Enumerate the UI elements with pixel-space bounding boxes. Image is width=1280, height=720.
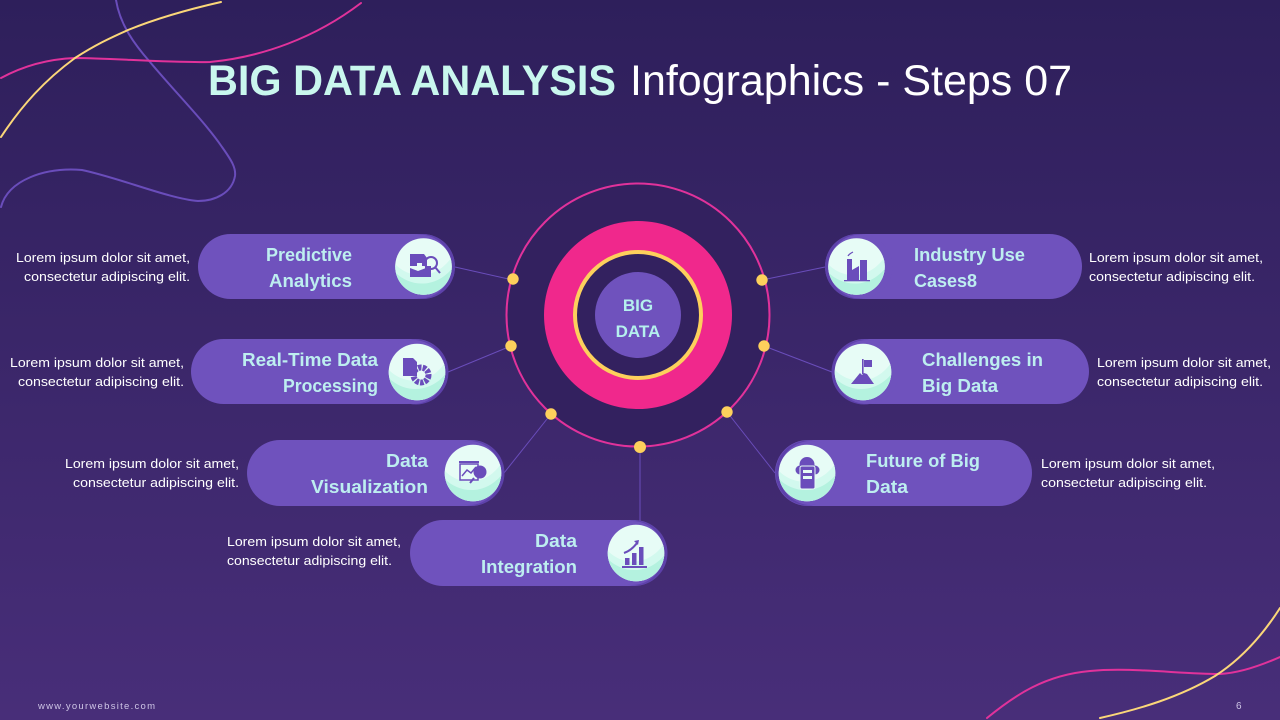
icon: rising bar chart [622,540,647,568]
pill: Data Integration: Integration [481,557,577,577]
title: Infographics - Steps 07 [630,57,1072,105]
pill: Challenges in Big Data: Challenges in [922,350,1043,370]
pill: Predictive Analytics: Predictive [266,245,352,265]
pill: Data Integration [410,520,668,586]
description: Predictive Analytics: consectetur adipiscing elit. [24,270,190,284]
pill: Challenges in Big Data: Big Data [922,376,999,396]
pill: Predictive Analytics [198,234,455,299]
description: Data Integration: Lorem ipsum dolor sit amet, [227,535,401,549]
pill: Predictive Analytics: Analytics [269,271,352,291]
pill: Data Visualization: Data [386,451,429,471]
description: Challenges in Big Data: consectetur adipiscing elit. [1097,375,1263,389]
pill: Future of Big Data: Future of Big [866,451,980,471]
connector lines [448,267,832,521]
description: Future of Big Data [1041,457,1215,490]
pill: Real-Time Data Processing: Processing [283,376,378,396]
title: BIG DATA ANALYSIS [208,57,616,105]
description: Future of Big Data: consectetur adipiscing elit. [1041,476,1207,490]
page number: 6 [1236,701,1242,712]
description: Future of Big Data: Lorem ipsum dolor sit amet, [1041,457,1215,471]
description: Data Integration: consectetur adipiscing elit. [227,554,392,568]
description: Real-Time Data Processing [10,356,184,389]
icon: factory [844,252,870,281]
description: Predictive Analytics: Lorem ipsum dolor sit amet, [16,251,190,265]
description: Data Visualization [65,457,239,490]
pill: Real-Time Data Processing [191,339,448,404]
pill: Challenges in Big Data [832,339,1089,404]
pill: Future of Big Data: Data [866,477,909,497]
description: Data Visualization: Lorem ipsum dolor sit amet, [65,457,239,471]
title [208,57,1072,105]
icon: report with magnifier [410,254,440,277]
connector dots [505,273,770,453]
pill: Data Visualization [247,440,504,506]
description: Real-Time Data Processing: consectetur adipiscing elit. [18,375,184,389]
icon: document and gear [403,358,428,382]
description: Real-Time Data Processing: Lorem ipsum dolor sit amet, [10,356,184,370]
pill: Industry Use Cases [825,234,1082,299]
icon: chart board with magnifier [459,461,486,483]
description: Challenges in Big Data: Lorem ipsum dolor sit amet, [1097,356,1271,370]
description: Predictive Analytics [16,251,190,284]
pill: Industry Use Cases: Cases8 [914,271,977,291]
pill: Data Integration: Data [535,531,578,551]
pill: Data Visualization: Visualization [311,477,428,497]
decorative curves bottom right [987,608,1280,718]
pill: Industry Use Cases: Industry Use [914,245,1025,265]
pill: Real-Time Data Processing: Real-Time Data [242,350,379,370]
center label: BIG [623,296,653,315]
description: Industry Use Cases [1089,251,1263,284]
icon: flag on mountain [851,359,874,384]
description: Data Integration [227,535,401,568]
description: Challenges in Big Data [1097,356,1271,389]
decorative curves top left [1,0,361,207]
description: Industry Use Cases: consectetur adipiscing elit. [1089,270,1255,284]
pill: Future of Big Data [775,440,1032,506]
description: Data Visualization: consectetur adipiscing elit. [73,476,239,490]
icon: cloud server [796,457,820,489]
center label: DATA [616,322,660,341]
footer website: www.yourwebsite.com [37,701,155,712]
central circle diagram [506,184,770,446]
description: Industry Use Cases: Lorem ipsum dolor sit amet, [1089,251,1263,265]
